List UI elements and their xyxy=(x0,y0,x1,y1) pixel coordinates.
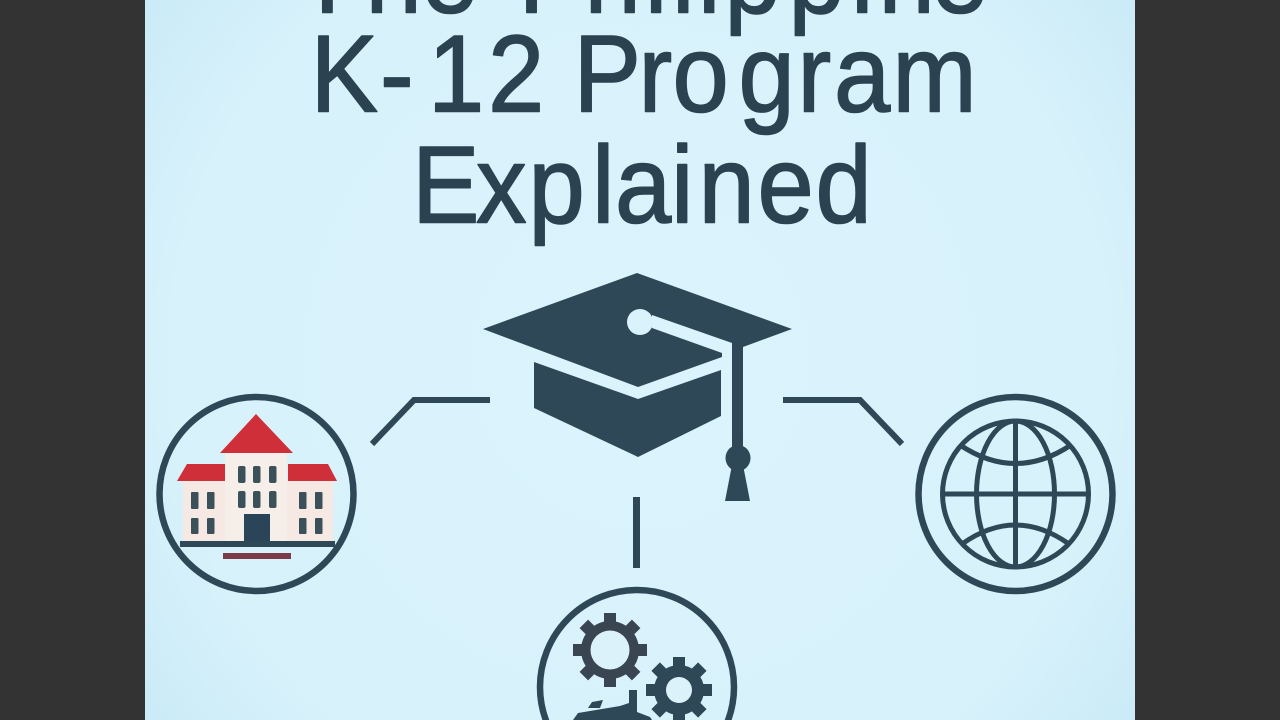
icon: gears and tools xyxy=(540,590,734,720)
icon: graduation cap xyxy=(483,273,792,501)
icon: school building xyxy=(160,397,354,591)
connector: bottom xyxy=(633,497,640,568)
connector: left xyxy=(372,400,490,444)
title: K-12 Program xyxy=(311,13,977,135)
icon: globe xyxy=(918,397,1112,591)
panel: poster xyxy=(145,0,1135,720)
connector: right xyxy=(783,400,902,444)
title: Explained xyxy=(412,124,872,246)
title xyxy=(297,0,988,246)
